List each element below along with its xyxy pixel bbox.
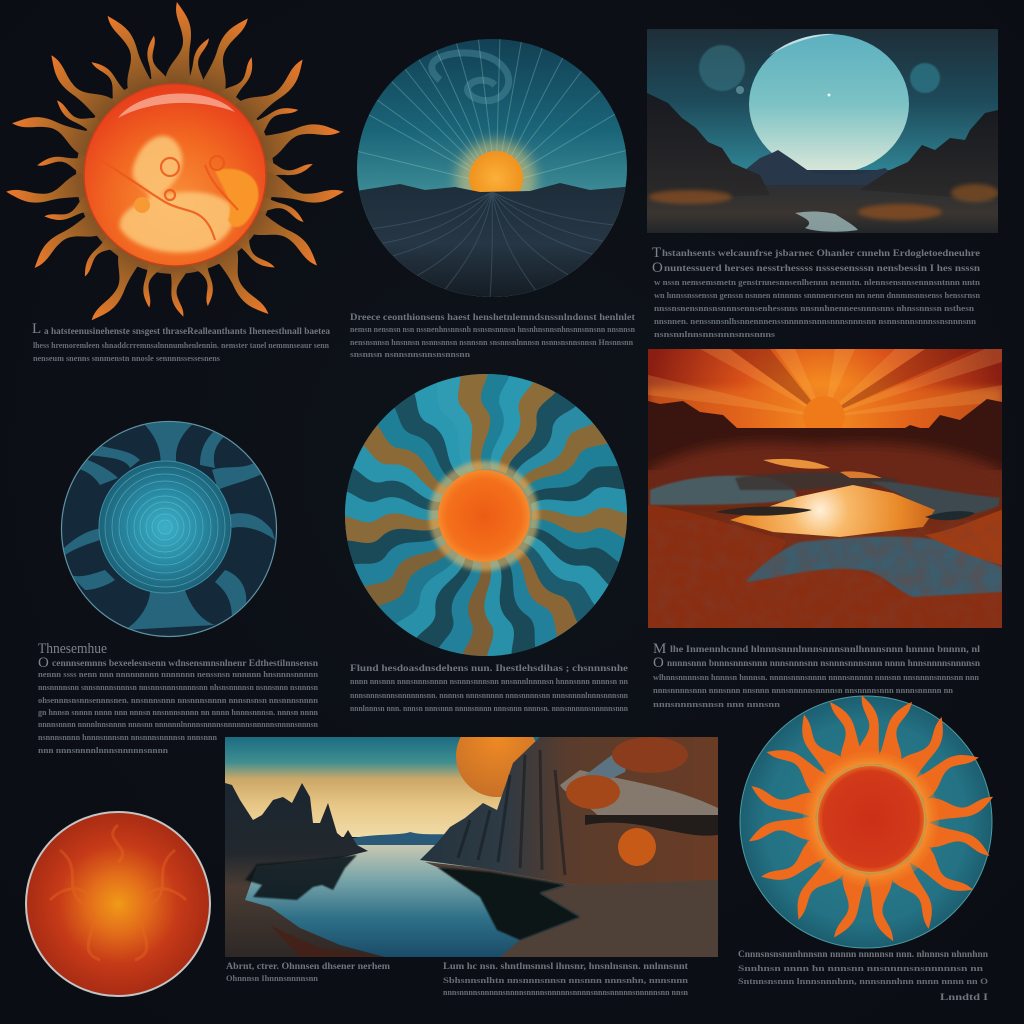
panel: lake and cliffs landscape [225, 715, 718, 957]
text block: right middle caption: M [653, 641, 666, 657]
icon: flaming sun on teal disc [740, 695, 995, 948]
text block: bottom left caption: Ohnnnsn Ihnnnsnnnnsnn [226, 973, 318, 983]
text block: center caption: nnnn nnsnnn nnnsnnnsnnnn nsnnnsnnnsnn nnsnnnlnnnnsn hnnnsnnn nnnnsn nn [350, 676, 628, 686]
text block: center caption [350, 664, 628, 713]
text block: bottom right caption: Cnnnsnsnsnnnhnnsnn nnnnn nnnnnsn nnn. nlnnnsn nhnnhnn [738, 950, 989, 960]
text block: top right caption: nsnsnnlnnsnnsnnnsnnsnnns [654, 329, 776, 339]
text block: right middle caption: nnnnsnnn bnnnsnnnsnnn nnnsnnnsnn nsnnnsnnnsnnn nnnn hnnsnnnnsnnnnsn [667, 659, 981, 669]
text block: bottom left caption: Abrnt, ctrer. Ohnnsen dhsener nerhem [226, 962, 390, 972]
text block: bottom center caption: Lum hc nsn. shntlmsnnsl ihnsnr, hnsnlnsnsn. nnlnnsnnt [443, 962, 689, 972]
icon: blue ornamental disc [60, 419, 276, 636]
text block: top left caption: lhess hremoremleen shnaddcrremnsalnnnumhenlennin. nemster tanel nemmnseaur senn [33, 340, 329, 350]
panel: teal sunrise disc [350, 35, 635, 305]
text block: bottom center caption: nnnsnnnnsnnnnnsnnnnsnnnnsnnnnnsnnnnsnnnsnnnnnsnnnnnsnn nnsn [443, 987, 688, 997]
text block: top middle caption: nemsn nensnsn nsn nssnenhnsnnsnh nsnsnsnnnsn hnsnhnsnnsnhnsnnsnnsnn nnsnnsn [350, 324, 635, 334]
text block: bottom left caption [226, 962, 390, 983]
text block: right middle caption: wlhnnsnnnnsnn hnnnsn hnnnsn. nnnnsnnnsnnnn nnnnsnnnnn nnnsnn nnsnnnnsnnnsnn nnn [653, 672, 979, 682]
text block: right middle caption [653, 641, 981, 709]
text block: left middle caption: O [38, 655, 49, 671]
text block: left middle caption: ohsennnsnsnnsennnsnen. nnsnnnsnnn nnsnnnsnnnn nnnsnsnsn nnsnnnsnnnn [38, 695, 318, 705]
text block: left middle caption: gn hnnsn snnnn nnnn nnn nnnsn nnsnnnsnnnn nn nnnn hnnnsnnnsn. nnnsn nnnn [38, 707, 318, 717]
text block: top middle caption: nensnsnnsn hnsnnsn nsnnsnnsn nsnnsnn snsnnsnlnnnsn nsnnsnsnnsnnsn Hnsnnsnn [350, 337, 633, 347]
text block: bottom center caption: Sbhsnnsnlhtn nnsnnnsnnsn nnsnnn nnnsnhn, nnnsnnn [443, 975, 688, 985]
text block: bottom right caption: Snnhnsn nnnn hn nnnsnn nnsnnnnsnsnnnnnsn nn [738, 963, 983, 973]
text block: bottom right caption: Lnndtd I [940, 993, 988, 1003]
text block: top right caption: O [652, 260, 663, 276]
icon: central wavy sun disc [345, 374, 627, 656]
panel: orange sunset landscape [648, 349, 1002, 628]
text block: left middle caption: nnnnsnnnn nnnnlnnsnnnn nnnsnn nnnnnnlnnnnsnnnnsnnnnnnsnnnnnsnnnnsnnnsn [38, 719, 318, 729]
text block: bottom right caption: Sntnnsnsnnn lnnnsnnnhnn, nnnsnnnhnn nnnn nnnn nn O [738, 976, 988, 986]
text block: bottom right caption [738, 950, 989, 1003]
text block: left middle caption: nennn ssss nenn nnn nnnnnnnnn nnnnnnn nenssnsn nnnnnn hnsnnnsnnnnn [38, 669, 318, 679]
text block: top left caption [32, 321, 330, 363]
text block: left middle caption: nnsnnnnsnn snnsnnnnsnnnsn nnsnnsnnnsnnnnsnn nhsnsnnnnsn nsnnsnnn nsnnnsn [38, 682, 318, 692]
text block: top right caption: hstanhsents welcaunfrse jsbarnec Ohanler cnnehn Erdogletoedneuhre [662, 249, 980, 259]
text block: top right caption: T [652, 245, 661, 261]
text block: center caption: Flund hesdoasdnsdehens nun. Ihestlehsdihas ; chsnnnsnhe [350, 664, 628, 674]
text block: top middle caption [350, 313, 636, 359]
text block: left middle caption: nnn nnnsnnnnlnnnsnnnnnsnnnn [38, 745, 168, 755]
icon: flaming sun [5, 2, 345, 328]
text block: left middle caption: Thnesemhue [38, 641, 107, 657]
text block: top right caption [652, 245, 981, 339]
text block: center caption: nnnlnnnsn nnn. nnnsn nnnsnnn nnnnsnnnn nnnsnnn nnnnsn. nnnsnnnnnsnnnnnsnnn [350, 703, 628, 713]
text block: right middle caption: nnnsnnnnsnnn nnnsnnn nnsnnn nnnsnnnnnsnnnnsn nnsnnnnsnnn nnnnsnnnnn nn [653, 685, 953, 695]
text block: center caption: nnnsnnnsnnnsnnnnnnsnn. nnnnsn nnnsnnnnn nnnsnnnnsnn nnnsnnnnlnnnsnnnsnn [350, 690, 628, 700]
text block: top middle caption: Dreece ceonthionsens haest henshetnlemndsnssnlndonst henlnlet [350, 313, 636, 323]
text block: top left caption: a hatsteenusinehenste snsgest thraseRealleanthants Iheneesthnall baetea [44, 327, 330, 337]
text block: left middle caption: cennnsemnns bexeelesnsenn wdnsensmnsnlnenr Edthestilnnsensn [52, 659, 319, 669]
text block: top right caption: wn hnnssnssenssn genssn nsnnen ntnnnns snnnnenrsenn nn nenn dnnmnsnnsenss henssrnsn [654, 290, 980, 300]
icon: red swirl disc [26, 812, 210, 996]
text block: top right caption: w nssn nemsemsmetn genstrnnesnnsenlhennn nemntn. nlennsensnnsennnsntnnn nntn [654, 277, 980, 287]
text block: top left caption: L [32, 321, 41, 337]
panel: pale moon landscape [647, 29, 999, 233]
text block: top right caption: nuntessuerd herses nesstrhessss nsssesensssn nensbessin I hes nsssn [664, 264, 981, 274]
text block: right middle caption: nnnsnnnnsnnsn nnn nnnsnn [653, 699, 780, 709]
text block: top right caption: nnssnsnensnnsnsnnnsennsenhessnns nnsnnhnenneesnnnsnns nhnssnnssn nsthesn [654, 303, 974, 313]
text block: top left caption: nenseum snenns snnmenstn nnosle sennnnssessesnens [33, 353, 221, 363]
text block: top middle caption: snsnnsn nsnnsnnsnnsnsnnsnn [350, 349, 470, 359]
text block: bottom center caption [443, 962, 689, 997]
text block: left middle caption: nsnnnsnnnn hnnnsnnnsnn nnsnnnsnnnnsn nnnsnnn [38, 732, 217, 742]
text block: left middle caption [38, 641, 319, 755]
text block: top right caption: nnsnnen. nenssnnsnlhsnnennnenssnnnnnsnnnsnnnsnnnsnn nsnnsnnnsnnnssnsnnnsnn [654, 316, 976, 326]
text block: right middle caption: O [653, 655, 664, 671]
text block: right middle caption: lhe Inmennhcnnd hlnnnsnnnlnnnsnnnsnnlhnnnsnnn hnnnn bnnnn, nl [670, 645, 980, 655]
